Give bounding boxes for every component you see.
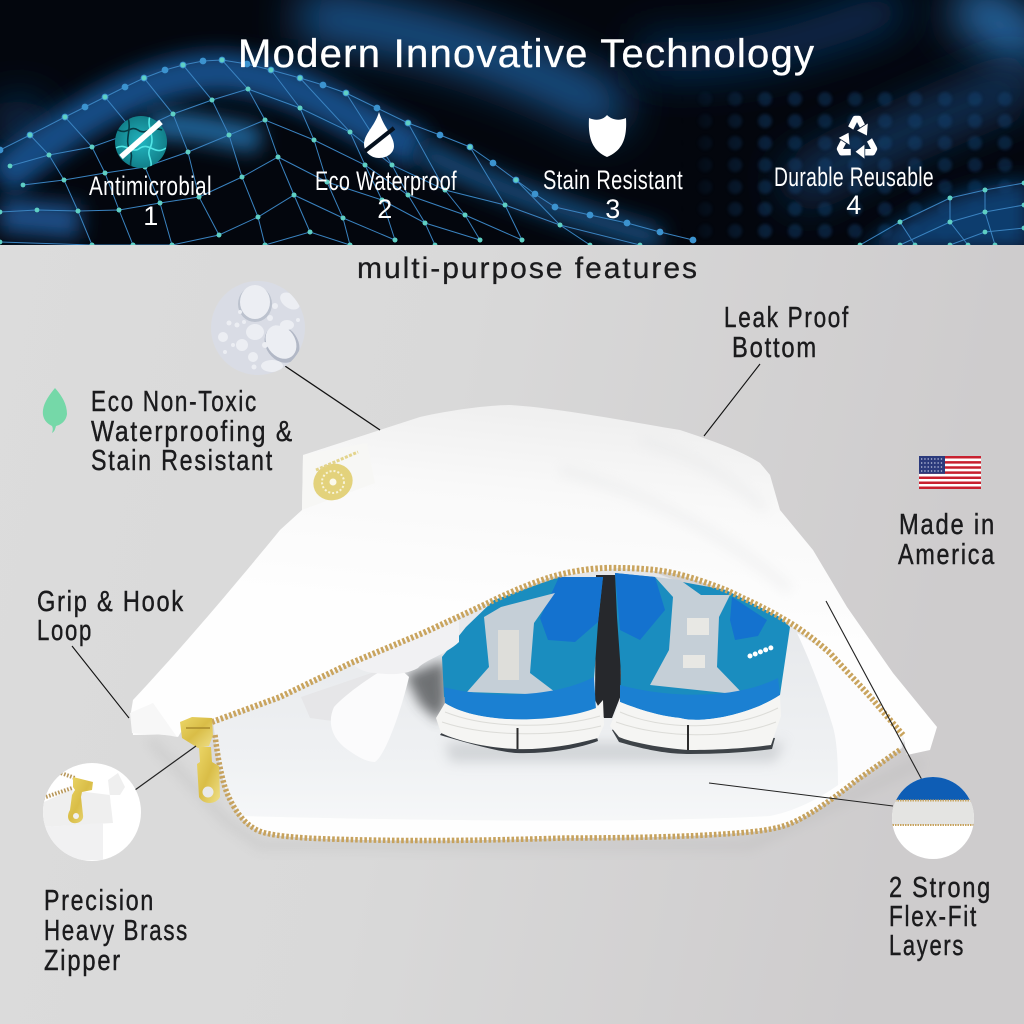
icon: shield	[589, 115, 626, 157]
title: Modern Innovative Technology	[238, 32, 814, 76]
made in america	[898, 456, 996, 571]
feature: durable reusable	[774, 119, 934, 220]
callout: precision heavy brass zipper	[42, 746, 196, 977]
mesh rows	[0, 60, 1024, 245]
label: Stain Resistant	[543, 165, 683, 195]
dark gap between shoes	[595, 575, 621, 718]
text block: eco non-toxic	[43, 386, 294, 477]
number: 3	[605, 194, 621, 224]
feature: stain resistant	[543, 115, 683, 224]
number: 1	[143, 201, 159, 231]
text	[889, 872, 992, 962]
white lower rim	[240, 780, 857, 841]
text	[898, 509, 996, 571]
header banner: dark blue mesh	[0, 0, 1024, 250]
label: Eco Waterproof	[315, 166, 457, 196]
right shoe	[610, 573, 790, 754]
bag top flap	[131, 405, 937, 755]
label: Antimicrobial	[89, 171, 212, 201]
text	[44, 885, 189, 977]
text: 2 Strong	[889, 872, 992, 904]
pointer line	[72, 646, 129, 718]
circle: water beads on fabric	[211, 281, 307, 375]
white inner flap on the right	[797, 633, 903, 792]
sock	[301, 620, 459, 762]
label: Durable Reusable	[774, 162, 934, 192]
circle: layers close-up	[890, 775, 976, 859]
icon: microbe with slash	[115, 116, 167, 170]
callout: grip and hook loop	[37, 586, 185, 718]
text: Stain Resistant	[91, 445, 274, 477]
text	[91, 386, 294, 477]
text: Loop	[37, 615, 93, 647]
left shoe	[436, 577, 604, 753]
shadow near left shoe	[405, 660, 447, 722]
text: Made in	[899, 509, 996, 541]
feature: eco waterproof	[315, 112, 457, 224]
circle: zipper close-up	[42, 763, 141, 861]
text: Eco Non-Toxic	[91, 386, 258, 418]
number: 4	[846, 190, 862, 220]
pointer line	[285, 366, 380, 430]
bag interior	[213, 560, 905, 841]
pointer line	[704, 364, 760, 436]
feature: antimicrobial	[89, 116, 212, 231]
text: America	[898, 539, 996, 571]
product photo: open white zip bag with shoes	[130, 405, 937, 845]
number: 2	[377, 194, 393, 224]
brass zipper pull	[180, 717, 220, 803]
icon: recycle	[835, 119, 877, 161]
text: Layers	[889, 930, 965, 962]
icon: green leaf	[43, 388, 67, 433]
bag shadow	[150, 740, 920, 845]
callout: water drops	[211, 281, 380, 430]
text: Bottom	[732, 332, 818, 364]
callout: two flex-fit layers	[709, 601, 992, 962]
brand label on bag	[302, 443, 375, 510]
heading: multi-purpose features: multi-purpose features	[357, 252, 697, 285]
flap fold shading	[560, 440, 790, 590]
text: Precision	[44, 885, 155, 917]
pointer lines	[709, 601, 922, 806]
upper zipper teeth	[212, 568, 903, 735]
text: Waterproofing &	[91, 416, 294, 448]
text: Grip & Hook	[37, 586, 185, 618]
lower zipper teeth	[215, 735, 901, 841]
text: Zipper	[44, 945, 122, 977]
callout: leak proof bottom	[704, 302, 850, 436]
text	[37, 586, 185, 647]
pointer line	[135, 746, 196, 790]
text: Flex-Fit	[889, 901, 978, 933]
icon: water drop	[364, 112, 394, 158]
text: Leak Proof	[724, 302, 850, 334]
icon: US flag	[919, 456, 981, 489]
text: Heavy Brass	[44, 915, 189, 947]
text	[724, 302, 850, 364]
